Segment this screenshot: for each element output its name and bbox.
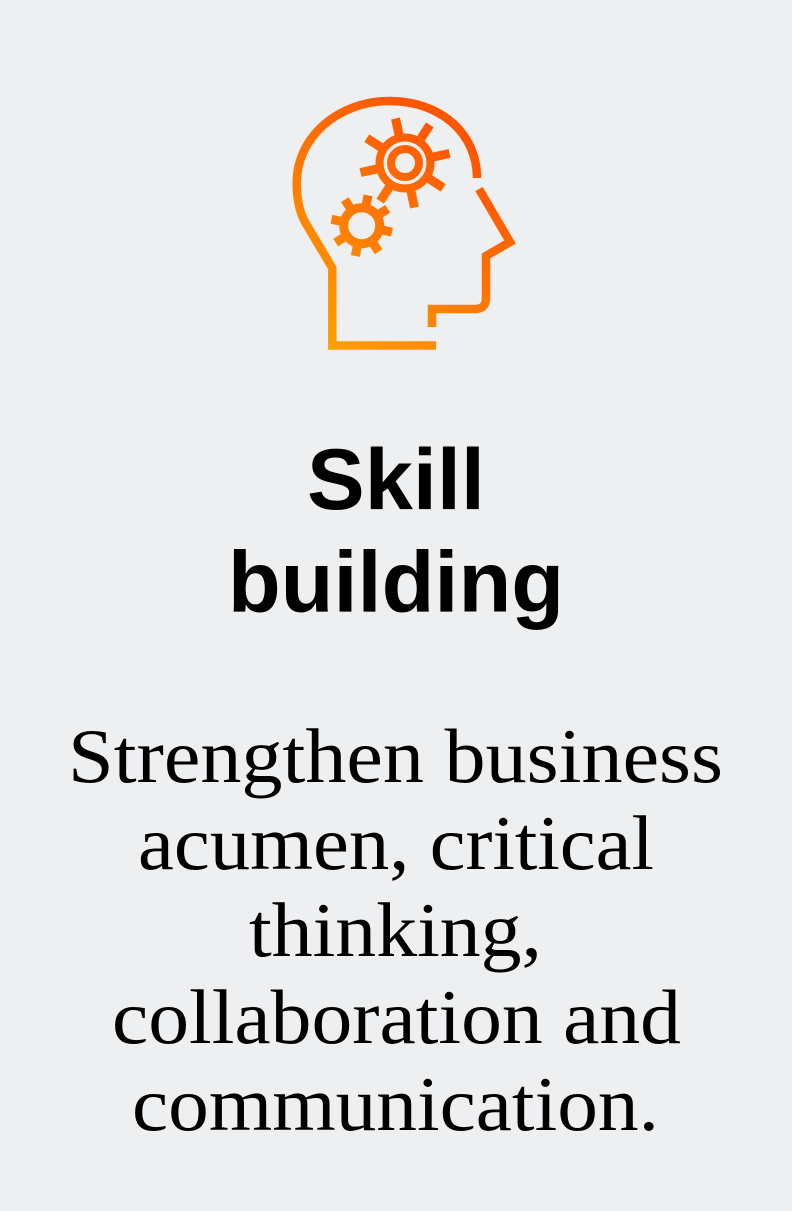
body text: collaboration and [112, 974, 681, 1060]
heading [228, 432, 564, 630]
head outline [297, 101, 477, 346]
body text: acumen, critical [138, 800, 654, 886]
icon: head with gears [297, 101, 510, 346]
body text: communication. [132, 1061, 659, 1147]
large gear [360, 118, 450, 208]
body text [68, 713, 723, 1147]
heading: building [228, 534, 564, 630]
heading: Skill [307, 432, 485, 528]
body text: Strengthen business [68, 713, 723, 799]
body text: thinking, [249, 887, 542, 973]
small gear [331, 195, 392, 256]
face profile [432, 189, 510, 327]
